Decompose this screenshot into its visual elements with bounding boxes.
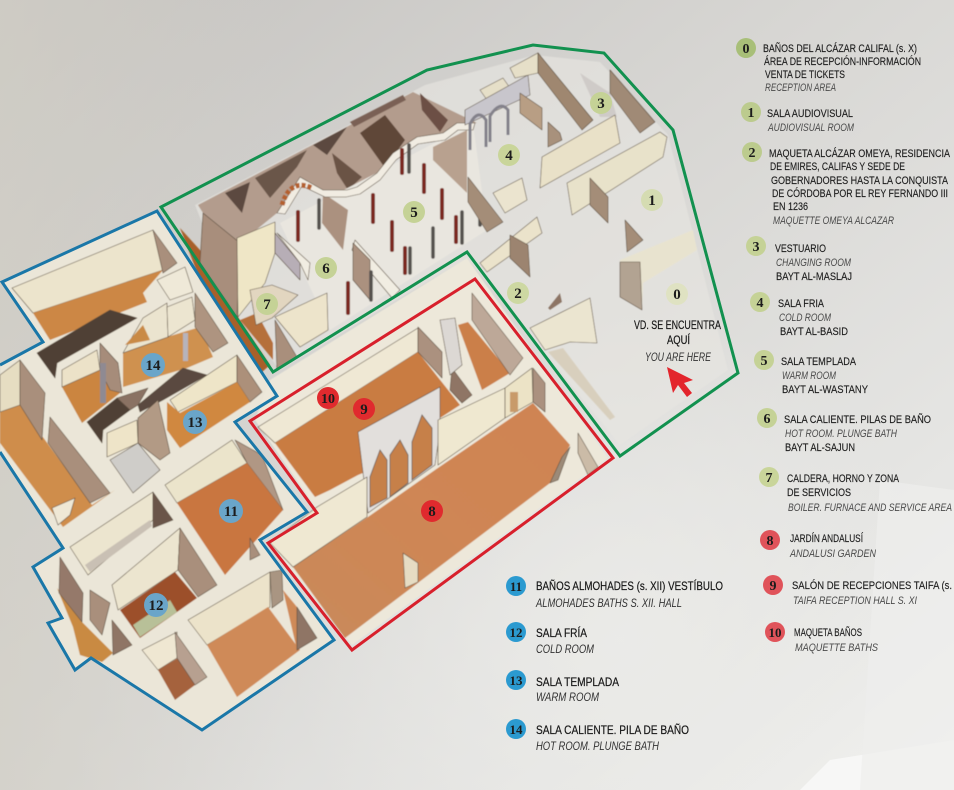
legend item 5: WARM ROOM [782,370,837,382]
legend item 0: RECEPTION AREA [765,82,836,94]
legend item 10 [765,622,879,654]
legend item 10: 10 [768,625,782,640]
top room [12,230,177,340]
grey columns [319,145,480,300]
you are here note: YOU ARE HERE [645,350,712,364]
marker 14: 14 [146,358,161,374]
legend item 2: MAQUETTE OMEYA ALCAZAR [773,215,894,227]
legend item 13 [506,670,619,704]
entrance ruins and stairs [530,293,615,420]
red zone outline [250,279,613,650]
legend item 12: 12 [510,625,522,640]
legend item 3: BAYT AL-MASLAJ [776,271,852,283]
legend item 1: SALA AUDIOVISUAL [767,108,853,120]
you are here note [634,318,721,364]
legend item 6: 6 [764,412,770,427]
legend item 7 [759,467,952,514]
zone: caliphal baths hall (green) [180,53,728,445]
legend item 4: COLD ROOM [779,312,832,324]
legend item 5: BAYT AL-WASTANY [782,384,869,396]
right chamber [418,293,523,403]
marker 6: 6 [322,261,330,277]
storage room [70,492,173,575]
legend item 13: WARM ROOM [536,690,599,704]
legend item 10: MAQUETA BAÑOS [794,626,862,639]
marker 0 [666,283,688,305]
arched screen [358,387,440,513]
legend item 3 [746,236,852,283]
legend item 1 [741,102,855,134]
legend item 8: 8 [766,534,774,549]
legend item 11: 11 [510,579,522,594]
legend item 5: SALA TEMPLADA [781,356,857,368]
legend item 13: SALA TEMPLADA [536,675,619,689]
legend: green zone [736,38,952,514]
legend item 0: BAÑOS DEL ALCÁZAR CALIFAL (s. X) [763,42,917,55]
blue zone outline [0,211,334,730]
marker 12 [144,593,168,617]
legend item 5: 5 [760,354,768,369]
marker 9 [353,398,375,420]
legend item 2: EN 1236 [773,201,808,213]
marker 9: 9 [360,402,368,418]
legend item 2: DE EMIRES, CALIFAS Y SEDE DE [770,161,905,173]
floor plan illustration [0,53,728,730]
legend item 13: 13 [510,673,523,688]
legend item 8 [760,530,876,560]
marker 2 [507,282,529,304]
room 13 warm room [167,355,262,448]
legend item 11: BAÑOS ALMOHADES (s. XII) VESTÍBULO [536,578,723,593]
legend item 11 [506,576,723,610]
marker 1 [641,189,663,211]
legend item 3: VESTUARIO [775,243,826,255]
marker 3: 3 [597,96,605,112]
legend item 4: 4 [756,296,764,311]
legend item 7: DE SERVICIOS [787,487,851,499]
plan markers [141,92,688,617]
legend item 8: ANDALUSI GARDEN [789,548,876,560]
legend item 0 [736,38,921,94]
lower left wall [270,477,367,567]
you are here note: AQUÍ [667,332,691,347]
small chambers [57,557,207,700]
legend item 14: 14 [510,722,523,737]
marker 6 [315,257,337,279]
legend item 6: HOT ROOM. PLUNGE BATH [785,428,897,440]
legend item 14 [506,719,689,753]
marker 12: 12 [148,598,164,614]
zone: Almohad baths rooms (blue) [0,211,334,730]
room 14 hot room and vaults [37,267,228,493]
legend item 8: JARDÍN ANDALUSÍ [790,532,864,545]
legend item 11: ALMOHADES BATHS S. XII. HALL [535,596,682,610]
marker 8: 8 [428,504,436,520]
legend item 0: 0 [742,42,750,57]
left room [0,360,115,527]
marker 10 [317,387,339,409]
legend item 14: SALA CALIENTE. PILA DE BAÑO [536,723,689,737]
room 12 cold room [112,528,217,638]
marker 7: 7 [263,297,271,313]
marker 10: 10 [321,392,335,407]
legend item 9: TAIFA RECEPTION HALL S. XI [793,595,917,607]
legend item 14: HOT ROOM. PLUNGE BATH [536,739,659,753]
legend: red zone [760,530,952,654]
legend item 6: BAYT AL-SAJUN [785,442,855,454]
marker 5 [403,201,425,223]
legend: blue zone [506,576,723,753]
marker 4: 4 [505,148,513,164]
legend item 1: AUDIOVISUAL ROOM [767,122,855,134]
marker 5: 5 [410,205,418,221]
marker 1: 1 [648,193,656,209]
marker 2: 2 [514,286,522,302]
legend item 6 [757,408,931,454]
legend item 6: SALA CALIENTE. PILAS DE BAÑO [784,413,931,426]
legend item 3: CHANGING ROOM [776,257,852,269]
marker 7 [256,293,278,315]
marker 11: 11 [224,504,238,520]
legend item 4: BAYT AL-BASID [780,326,848,338]
marker 3 [590,92,612,114]
back wall and reception hall floor [258,328,460,497]
west wall and boiler [180,213,328,372]
room bottom right [188,570,317,697]
legend item 12: SALA FRÍA [536,625,587,640]
hall floor with arches [277,123,487,330]
icon: red arrow [667,367,693,397]
marker 11 [219,499,243,523]
legend item 10: MAQUETTE BATHS [795,642,879,654]
vault ceiling [198,92,477,243]
legend item 4 [750,292,848,338]
arcade and north rooms [465,53,697,310]
marker 13: 13 [188,415,202,431]
marker 8 [421,500,443,522]
legend item 9 [763,575,952,607]
legend item 7: 7 [766,471,772,486]
room 11 [165,440,283,575]
legend item 0: VENTA DE TICKETS [765,69,845,81]
legend item 4: SALA FRIA [778,298,825,310]
garden floor [293,403,570,638]
green zone outline [161,45,738,456]
marker 4 [498,144,520,166]
garden back wall [403,368,598,588]
red columns [298,150,456,313]
legend item 5 [754,350,869,396]
marker 13 [183,410,207,434]
you are here note: VD. SE ENCUENTRA [634,318,721,332]
legend item 7: CALDERA, HORNO Y ZONA [787,473,900,485]
marker 0: 0 [673,287,681,303]
legend item 2: 2 [748,146,756,161]
legend item 2 [742,142,951,227]
zone: Taifa reception hall and garden (red) [255,258,608,645]
legend item 9: 9 [770,579,776,594]
legend item 12 [506,622,594,656]
legend item 3: 3 [752,240,760,255]
legend item 1: 1 [748,106,754,121]
marker 14 [141,353,165,377]
legend item 12: COLD ROOM [536,642,594,656]
